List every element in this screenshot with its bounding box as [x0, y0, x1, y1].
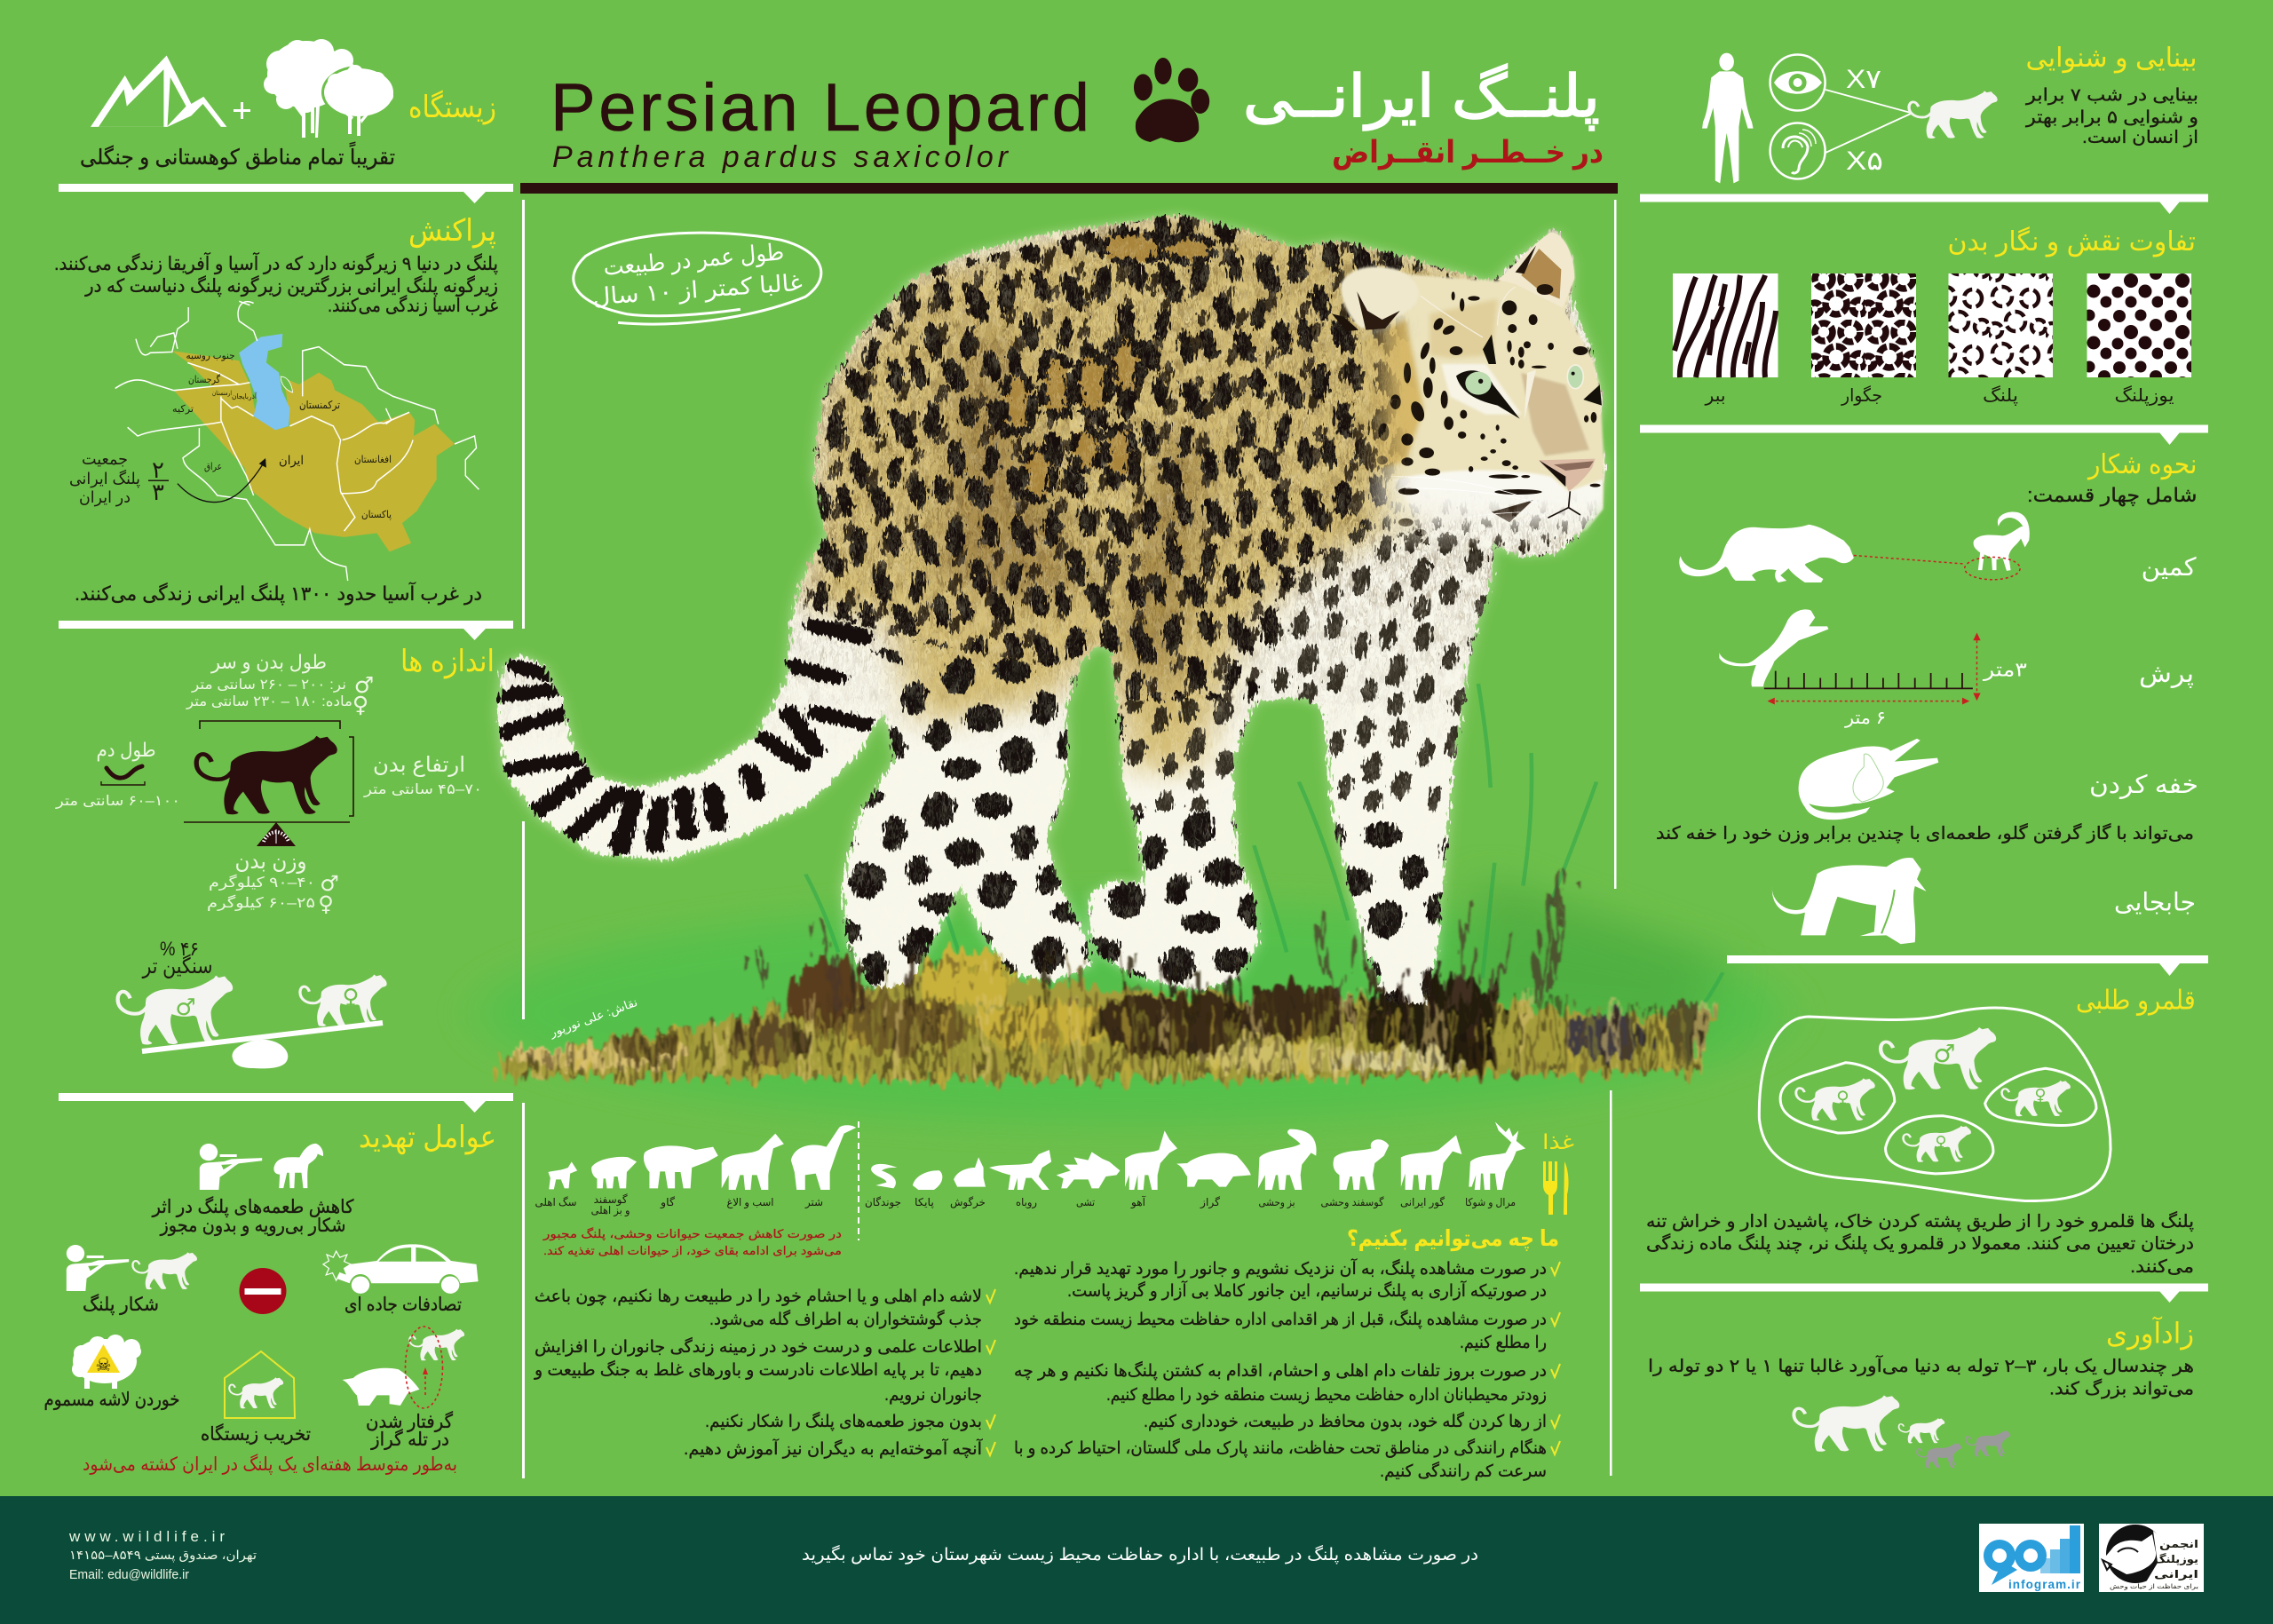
seesaw: male heavier: ۴۶ % [160, 938, 199, 960]
prey labels: خرگوش [950, 1196, 986, 1209]
distribution text: زیرگونه پلنگ ایرانی بزرگترین زیرگونه پلنگ دنیاست که در [84, 275, 498, 297]
tail length: طول دم [96, 739, 156, 761]
reproduction text: می‌تواند بزرگ کند. [2049, 1379, 2194, 1399]
body weight: ♀ [318, 891, 334, 916]
advice column left: جذب گوشتخواران به اطراف گله می‌شود. [709, 1309, 982, 1329]
two thirds of the population callout [69, 450, 169, 507]
advice column right [1014, 1257, 1547, 1481]
icon: mountains [91, 55, 226, 127]
callout: life span [574, 233, 821, 324]
pattern: leopard [1948, 273, 2053, 407]
heading: hunting: نحوه شکار [2087, 450, 2197, 479]
heading: sight and hearing: بینایی و شنوایی [2026, 44, 2197, 74]
icon: no entry sign [240, 1268, 286, 1314]
body weight [207, 850, 339, 916]
threat: road accidents [323, 1244, 479, 1315]
head and body length: ♀ [352, 692, 368, 717]
step: choke: خفه کردن [2089, 771, 2198, 799]
logo: infogram: infogram.ir [2008, 1578, 2081, 1591]
body height: ارتفاع بدن [373, 753, 465, 777]
contact details: www.wildlife.ir [68, 1528, 225, 1545]
plus sign [234, 102, 250, 119]
two thirds of the population callout: ۲ [152, 456, 164, 483]
prey labels [535, 1193, 1516, 1217]
contact details [68, 1528, 257, 1582]
advice column right: در صورت مشاهده پلنگ، به آن نزدیک نشویم و جانور را مورد تهدید قرار ندهیم. [1014, 1257, 1547, 1279]
territory diagram [1759, 1008, 2111, 1201]
domestic prey note: می‌شود برای ادامه بقای خود، از حیوانات اهلی تغذیه کند. [543, 1244, 842, 1258]
map labels: ترکیه [172, 404, 194, 415]
body weight: ♂ [320, 871, 339, 896]
icon: eye [1770, 55, 1826, 110]
body height: ۷۰–۴۵ سانتی متر [363, 782, 482, 798]
domestic prey note [543, 1227, 842, 1258]
threat: habitat destruction [201, 1351, 311, 1445]
sight and hearing text: بینایی در شب ۷ برابر [2025, 85, 2198, 105]
advice column right: هنگام رانندگی در مناطق تحت حفاظت، مانند پارک ملی گلستان، احتیاط کرده و با [1014, 1438, 1547, 1458]
prey labels: جوندگان [865, 1196, 901, 1209]
territory diagram: ♀ [1935, 1133, 1947, 1152]
panel: sight and hearing: X۵ [1846, 147, 1883, 176]
heading: coat patterns: تفاوت نقش و نگار بدن [1948, 226, 2196, 257]
prey labels: آهو [1130, 1195, 1146, 1209]
tail length [55, 739, 180, 810]
map labels: جنوب روسیه [186, 351, 234, 361]
map labels: گرجستان [188, 374, 221, 385]
panel: reproduction [1648, 1316, 2194, 1468]
threat: prey depletion: کاهش طعمه‌های پلنگ در اثر [152, 1196, 353, 1217]
heading: threats: عوامل تهدید [359, 1121, 496, 1155]
prey labels: بز وحشی [1259, 1196, 1295, 1209]
distribution text [54, 252, 498, 316]
prey labels: شتر [804, 1196, 823, 1209]
tail bands [503, 626, 863, 850]
prey labels: پایکا [915, 1196, 934, 1208]
heading: habitat: زیستگاه [408, 90, 496, 124]
wild and domestic prey silhouettes [548, 1121, 1525, 1190]
footer [0, 1496, 2273, 1624]
painter credit: نقاش: علی نورپور [547, 995, 639, 1041]
panel: habitat [80, 39, 496, 170]
map labels: ارمنستان [212, 391, 232, 397]
pattern: cheetah [2087, 273, 2191, 407]
heading: distribution: پراکنش [408, 214, 496, 249]
icon: ear [1770, 123, 1826, 179]
english title: Persian Leopard [550, 70, 1089, 146]
advice column right: زودتر محیطبانان اداره حفاظت محیط زیست منطقه خود را مطلع کنیم. [1106, 1386, 1547, 1405]
prey labels: گوسفند [594, 1193, 628, 1207]
two thirds of the population callout: پلنگ ایرانی [69, 469, 140, 488]
population note: در غرب آسیا حدود ۱۳۰۰ پلنگ ایرانی زندگی می‌کنند. [75, 582, 482, 606]
body weight: ۲۵–۶۰ کیلوگرم [207, 894, 315, 912]
heading: reproduction: زادآوری [2106, 1316, 2194, 1350]
head and body length: ماده: ۱۸۰ – ۲۳۰ سانتی متر [186, 694, 352, 710]
advice column left: دهیم، تا بر پایه اطلاعات نادرست و باورهای غلط به جنگ طبیعت و [534, 1360, 982, 1380]
icon: fork and knife [1543, 1161, 1569, 1215]
logo: infogram [1979, 1524, 2084, 1592]
callout: life span: طول عمر در طبیعت [602, 238, 785, 281]
prey labels: و بز اهلی [591, 1204, 630, 1217]
endangered subtitle: در خــطــر انقــراض [1332, 135, 1604, 170]
step: jump [1719, 609, 2194, 728]
seesaw: male heavier: سنگین تر [142, 954, 213, 978]
seesaw: male heavier [118, 938, 387, 1068]
threat: poisoned carcass: ☠ [96, 1354, 111, 1375]
head and body length: ♂ [354, 672, 374, 698]
two thirds of the population callout: در ایران [79, 488, 131, 507]
sight and hearing text [2025, 85, 2198, 147]
heading: measurements: اندازه ها [400, 645, 495, 678]
heading: what can we do: ما چه می‌توانیم بکنیم؟ [1347, 1226, 1559, 1252]
prey labels: سگ اهلی [535, 1196, 577, 1208]
step: choke: می‌تواند با گاز گرفتن گلو، طعمه‌ای با چندین برابر وزن خود را خفه کند [1656, 823, 2194, 844]
panel: threats [44, 1121, 496, 1475]
habitat caption: تقریباً تمام مناطق کوهستانی و جنگلی [80, 142, 395, 170]
territory diagram: ♂ [1933, 1039, 1956, 1068]
rosettes on flank [1003, 233, 1213, 501]
pattern: tiger: ببر [1704, 386, 1726, 406]
panel: coat pattern differences [1673, 226, 2196, 407]
advice column right: در صورتیکه آزاری به پلنگ نرسانیم، این جانور کاملا بی آزار و گریز پاست. [1067, 1279, 1547, 1301]
pattern: jaguar: جگوار [1841, 385, 1882, 406]
map: range of the Persian leopard [115, 301, 479, 581]
threat: prey depletion: شکار بی‌رویه و بدون مجوز [160, 1216, 346, 1236]
prey labels: اسب و الاغ [726, 1196, 774, 1209]
title block [520, 58, 1618, 194]
pattern: cheetah: یوزپلنگ [2115, 384, 2174, 407]
threat: prey depletion [152, 1144, 353, 1236]
panel: hunting method [1656, 450, 2198, 944]
pattern: leopard: پلنگ [1983, 384, 2018, 407]
heading: territory: قلمرو طلبی [2076, 986, 2196, 1017]
head and body length: نر: ۲۰۰ – ۲۶۰ سانتی متر [191, 677, 346, 693]
domestic prey note: در صورت کاهش جمعیت حیوانات وحشی، پلنگ مجبور [543, 1227, 842, 1241]
sight and hearing text: و شنوایی ۵ برابر بهتر [2025, 108, 2198, 128]
callout: life span: غالبا کمتر از ۱۰ سال [591, 269, 804, 311]
map labels: ایران [279, 453, 304, 468]
territory text: پلنگ ها قلمرو خود را از طریق پشته کردن خاک، پاشیدن ادار و خراش تنه [1646, 1210, 2194, 1232]
advice column left: بدون مجوز طعمه‌های پلنگ را شکار نکنیم. [705, 1412, 982, 1431]
distribution text: غرب آسیا زندگی می‌کنند. [328, 294, 498, 316]
reproduction text: هر چندسال یک بار، ۳–۲ توله به دنیا می‌آورد غالبا تنها ۱ یا ۲ دو توله را [1648, 1354, 2194, 1376]
prey labels: گراز [1200, 1196, 1220, 1209]
pattern: tiger [1673, 273, 1778, 406]
prey labels: گاو [660, 1196, 675, 1209]
icon: trees [264, 39, 393, 138]
prey labels: مرال و شوکا [1465, 1196, 1516, 1209]
advice column left: جانوران نرویم. [884, 1386, 982, 1405]
contact details: تهران، صندوق پستی ۸۵۴۹–۱۴۱۵۵ [69, 1548, 257, 1563]
prey labels: تشی [1076, 1196, 1095, 1208]
title underline bar [520, 183, 1618, 194]
step: ambush: کمین [2142, 553, 2197, 582]
territory text: می‌کنند. [2130, 1257, 2194, 1277]
leopard head detail [1332, 233, 1604, 549]
seesaw: male heavier: ♀ [342, 985, 360, 1011]
panel: what can we do [534, 1226, 1560, 1481]
map labels: افغانستان [354, 455, 392, 465]
threat: boar trap: در تله گراز [370, 1429, 449, 1450]
advice column right: را مطلع کنیم. [1460, 1334, 1547, 1352]
advice column left [534, 1287, 983, 1459]
advice column left: لاشه دام اهلی و یا احشام خود را در طبیعت رها نکنیم، چون باعث [535, 1287, 982, 1306]
advice column left: آنچه آموخته‌ایم به دیگران نیز آموزش دهیم. [684, 1438, 983, 1459]
step: carry [1772, 858, 2196, 944]
grass in front of the paws [856, 949, 1433, 1018]
head and body length: طول بدن و سر [210, 651, 327, 673]
leopard body [479, 204, 1621, 1013]
threat: poisoned carcass [44, 1335, 179, 1410]
panel: sight and hearing [1702, 44, 2198, 183]
icon: human figure [1702, 53, 1753, 183]
territory diagram: ♀ [1836, 1087, 1849, 1108]
panel: distribution [54, 214, 498, 606]
pattern: jaguar [1811, 273, 1916, 406]
body weight: ۴۰–۹۰ کیلوگرم [209, 874, 315, 891]
multipliers: X۷ [1846, 65, 1881, 94]
threat: boar trap [343, 1327, 464, 1450]
scientific name: Panthera pardus saxicolor [552, 140, 1010, 174]
advice column right: در صورت مشاهده پلنگ، قبل از هر اقدامی اداره حفاظت محیط زیست منطقه خود [1014, 1310, 1547, 1329]
tail length: ۱۰۰–۶۰ سانتی متر [55, 794, 180, 810]
check marks [986, 1262, 1560, 1455]
threat: poisoned carcass: خوردن لاشه مسموم [44, 1390, 179, 1410]
reproduction text [1648, 1354, 2194, 1399]
weekly killed note: به‌طور متوسط هفته‌ای یک پلنگ در ایران کشته می‌شود [83, 1454, 457, 1475]
heading: food: غذا [1542, 1130, 1574, 1153]
prey labels: گوسفند وحشی [1321, 1196, 1384, 1209]
advice column right: در صورت بروز تلفات دام اهلی و احشام، اقدام به کشتن پلنگ‌ها نکنیم و هر چه [1014, 1361, 1547, 1381]
main leopard illustration with grass [479, 204, 1784, 1122]
prey labels: گور ایرانی [1400, 1196, 1445, 1209]
advice column left: اطلاعات علمی و درست خود در زمینه زندگی جانوران را افزایش [535, 1336, 982, 1357]
threat: leopard hunting: شکار پلنگ [83, 1294, 159, 1315]
head and body length [186, 651, 374, 717]
step: jump: ۳متر [1983, 659, 2027, 680]
logo: wildlife society: انجمن [2159, 1538, 2198, 1550]
step: jump: پرش [2139, 660, 2194, 688]
territory text: درختان تعیین می کنند. معمولا در قلمرو یک پلنگ نر، چند پلنگ ماده زندگی [1646, 1232, 2194, 1255]
two thirds of the population callout: ۳ [152, 479, 164, 505]
threat: boar trap: گرفتار شدن [366, 1411, 453, 1432]
sight and hearing text: از انسان است. [2082, 128, 2198, 147]
map labels: ترکمنستان [299, 399, 340, 412]
threat: habitat destruction: تخریب زیستگاه [201, 1423, 311, 1445]
step: carry: جابجایی [2114, 889, 2196, 916]
contact details: Email: edu@wildlife.ir [69, 1567, 189, 1582]
logo: wildlife society: برای حفاظت از حیات وحش [2110, 1584, 2198, 1590]
threat: leopard hunting [67, 1245, 197, 1315]
territory diagram: ♀ [2034, 1086, 2047, 1105]
step: ambush [1679, 511, 2197, 582]
logo: wildlife society [2099, 1524, 2204, 1592]
advice column right: از رها کردن گله خود، بدون محافظ در طبیعت، خودداری کنیم. [1144, 1411, 1547, 1431]
hunting subheading: شامل چهار قسمت: [2027, 484, 2197, 506]
panel: territory [1646, 986, 2196, 1277]
advice column right: سرعت کم رانندگی کنیم. [1380, 1461, 1547, 1481]
body weight: وزن بدن [234, 850, 307, 874]
persian title: پلنــگ ایرانــی [1243, 63, 1600, 131]
threat: road accidents: تصادفات جاده ای [345, 1295, 462, 1315]
prey labels: روباه [1016, 1196, 1037, 1209]
map labels: آذربایجان [232, 392, 257, 400]
two thirds of the population callout: جمعیت [82, 450, 128, 468]
distribution text: پلنگ در دنیا ۹ زیرگونه دارد که در آسیا و آفریقا زندگی می‌کنند. [54, 252, 498, 274]
map labels: عراق [204, 462, 222, 472]
icon: mother with cubs [1794, 1396, 2010, 1468]
map labels: پاکستان [361, 510, 392, 520]
dark leopard with brackets [184, 721, 353, 846]
logo: wildlife society: ایرانی [2154, 1568, 2198, 1580]
panel: food [535, 1121, 1574, 1258]
step: jump: ۶ متر [1844, 709, 1886, 728]
body height [363, 753, 482, 798]
seesaw: male heavier: ♂ [175, 994, 196, 1021]
step: choke [1656, 739, 2198, 844]
logo: wildlife society: یوزپلنگ [2154, 1553, 2198, 1566]
section divider lines [59, 184, 2208, 1478]
map labels [172, 351, 392, 520]
icon: paw print [1134, 58, 1209, 142]
territory text [1646, 1210, 2194, 1277]
footer message: در صورت مشاهده پلنگ در طبیعت، با اداره حفاظت محیط زیست شهرستان خود تماس بگیرید [802, 1544, 1478, 1565]
panel: body measurements [55, 645, 495, 1068]
